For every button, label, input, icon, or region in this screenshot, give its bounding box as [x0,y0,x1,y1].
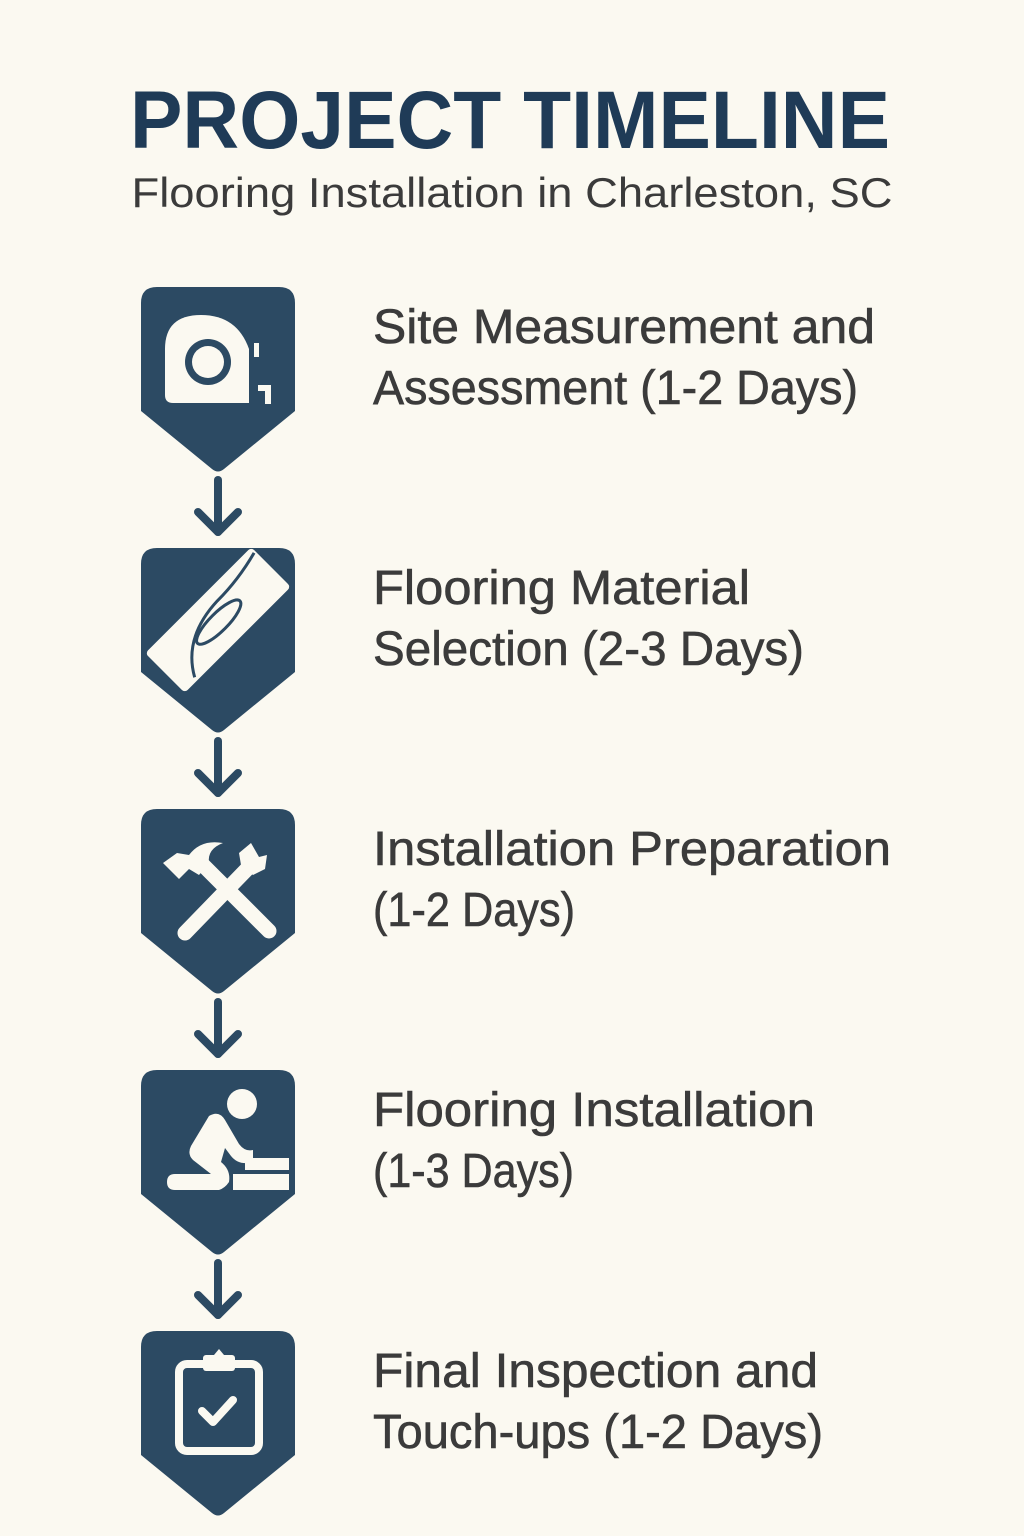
text: step 3: (1-2 Days) [373,884,575,937]
step texts [373,301,891,1459]
text: step 4: (1-3 Days) [373,1145,574,1198]
text: step 1: Site Measurement and [373,301,875,354]
icon: wood plank [145,547,291,693]
title: PROJECT TIMELINE [130,75,890,166]
text: step 1: Assessment (1-2 Days) [373,362,858,415]
text: step 5 [373,1345,823,1459]
arrow 2 [198,741,238,793]
arrow 4 [198,1263,238,1315]
step 3: installation preparation [141,809,295,994]
text: step 3 [373,823,891,937]
text: step 2 [373,562,804,676]
text: step 2: Flooring Material [373,562,750,615]
icon: clipboard check [179,1349,259,1451]
text: step 5: Touch-ups (1-2 Days) [373,1406,823,1459]
text: step 2: Selection (2-3 Days) [373,623,804,676]
icon: kneeling worker [167,1089,289,1190]
text: step 1 [373,301,875,415]
icon: hammer and wrench [163,842,269,933]
subtitle: Flooring Installation in Charleston, SC [132,169,892,216]
step 2: material selection [141,547,295,732]
text: step 4: Flooring Installation [373,1084,815,1137]
text: step 5: Final Inspection and [373,1345,818,1398]
step 4: flooring installation [141,1070,295,1254]
text: step 3: Installation Preparation [373,823,891,876]
icon: tape measure [165,315,271,404]
arrow 3 [198,1002,238,1054]
step 1: site measurement [141,287,295,472]
step 5: final inspection [141,1331,295,1516]
text: step 4 [373,1084,815,1198]
arrow 1 [198,480,238,532]
